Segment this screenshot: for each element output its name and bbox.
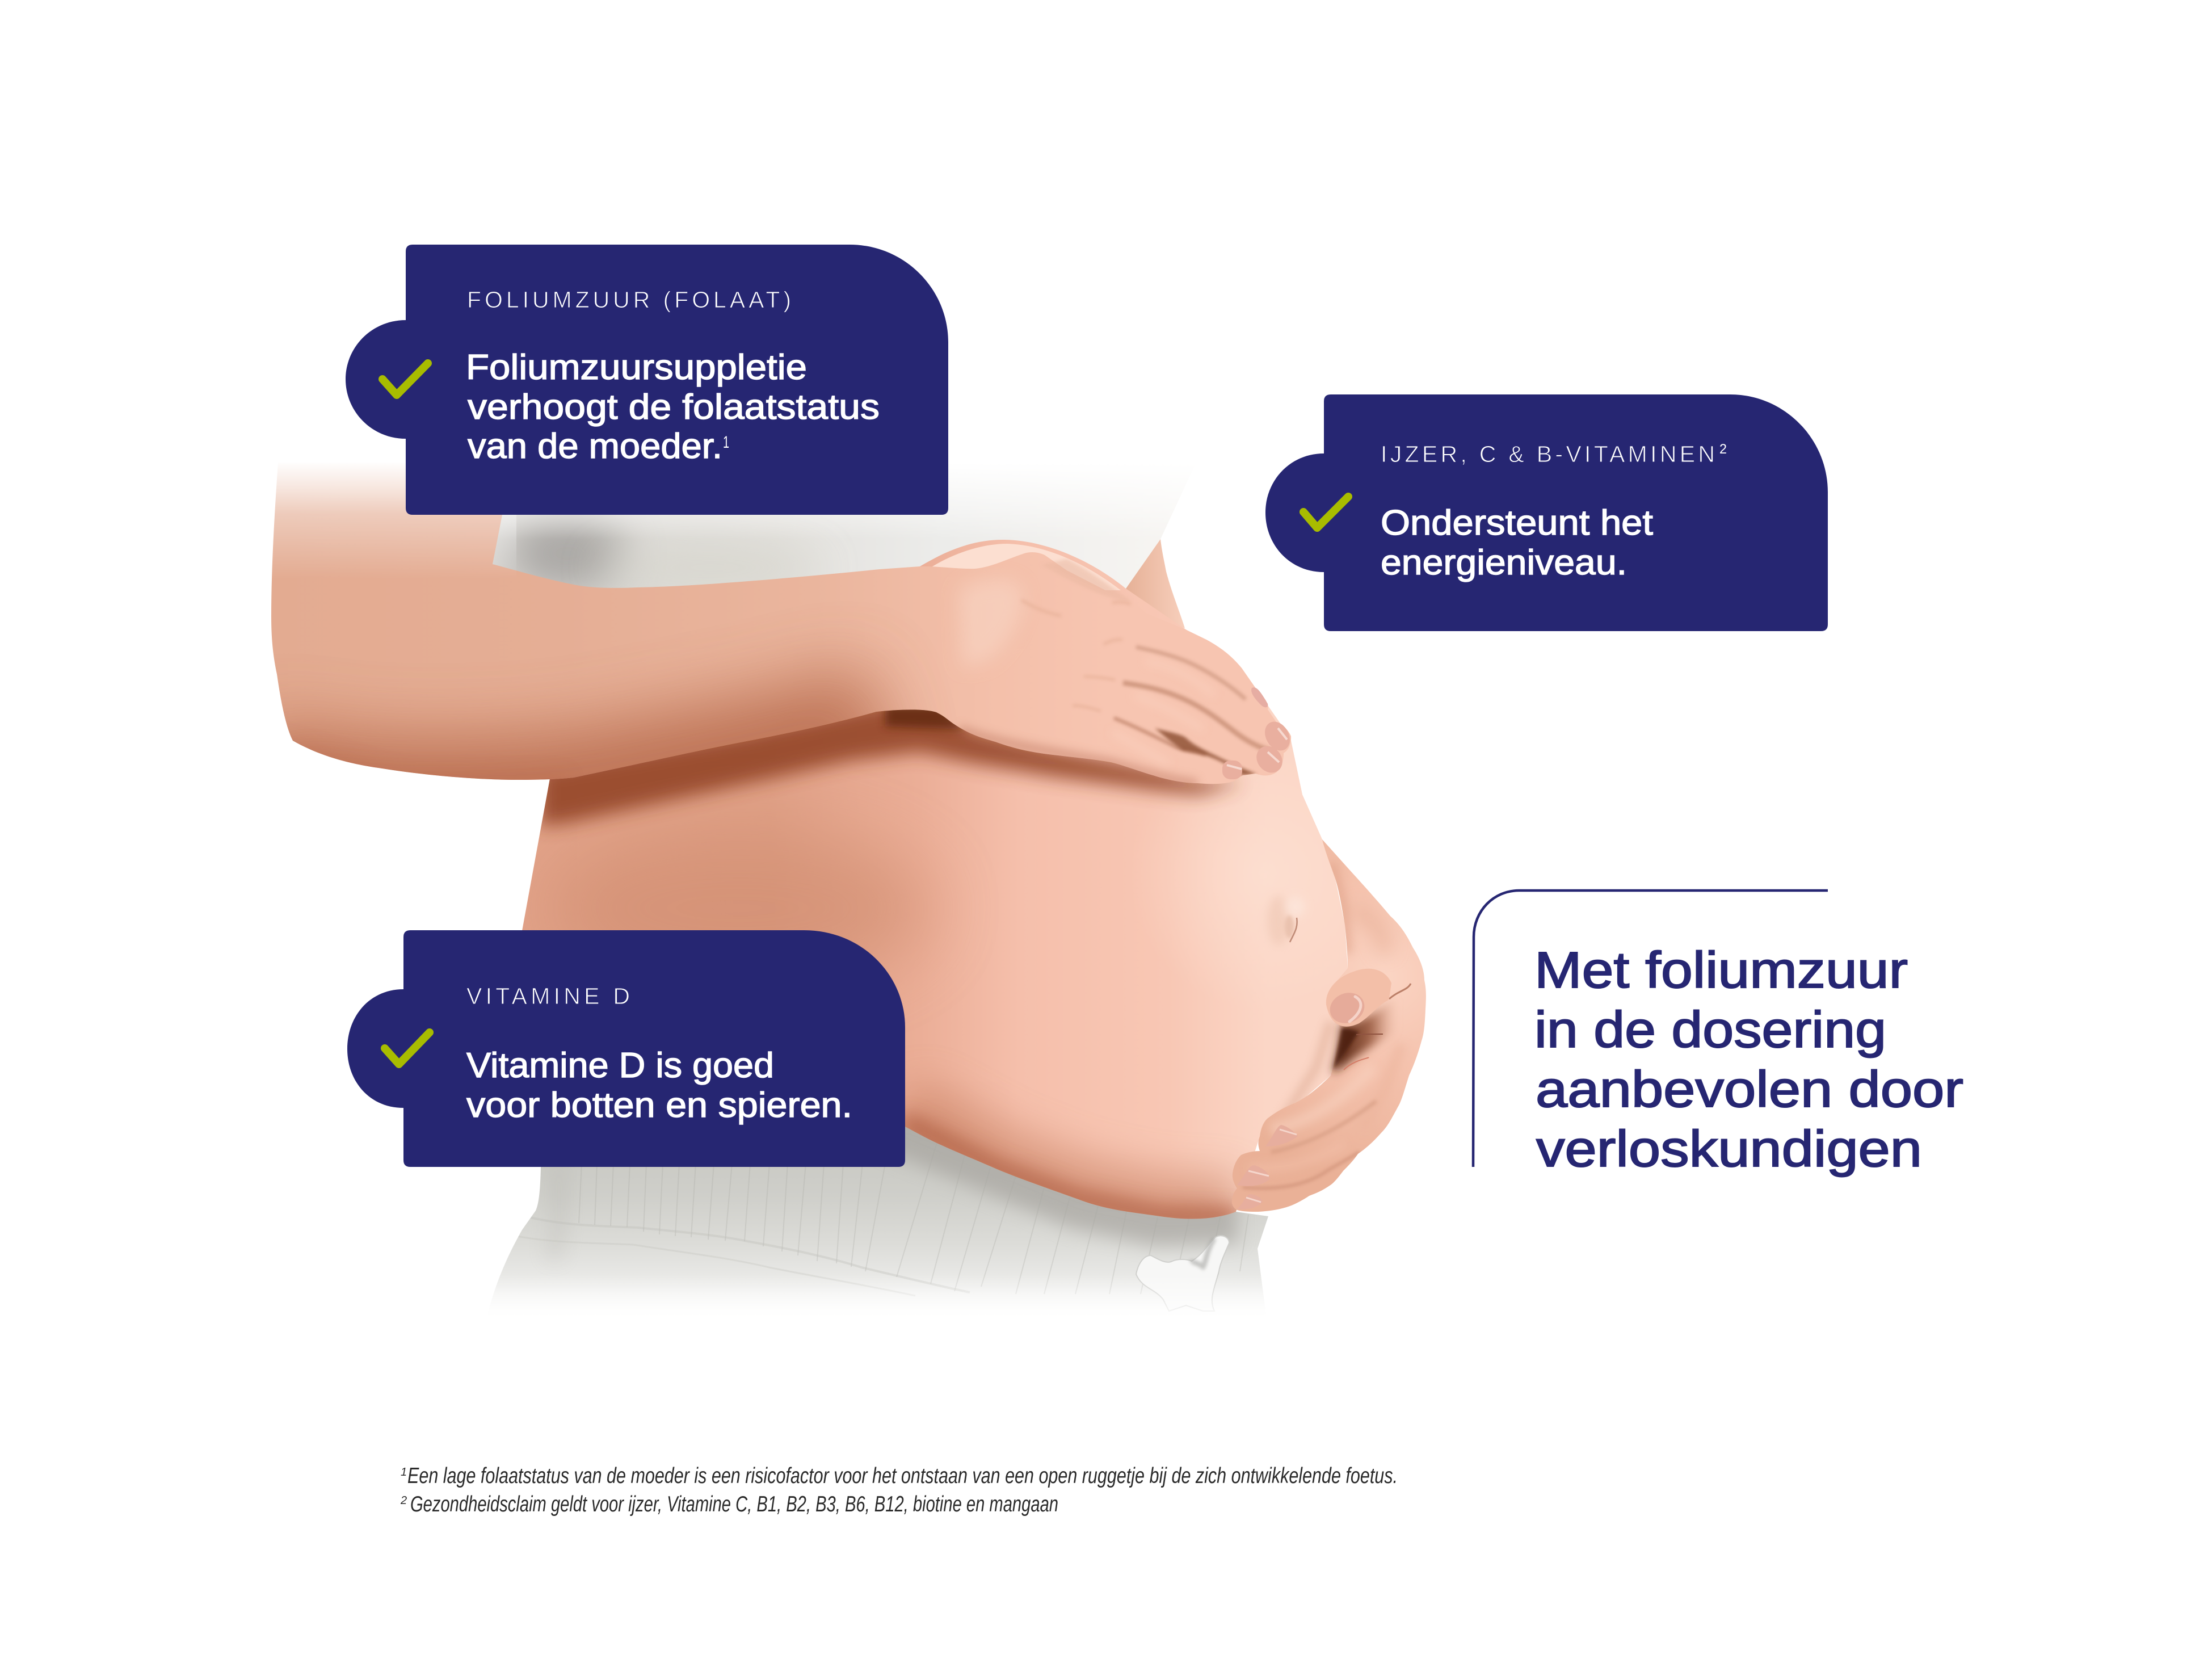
finger gaps (1136, 647, 1246, 699)
shadow cast by the arm and hand (539, 704, 1243, 826)
callout heading (1534, 942, 1963, 1178)
finger highlights (1112, 661, 1214, 763)
panel: vitamine D (347, 930, 905, 1167)
panel: foliumzuur (346, 245, 948, 515)
text: ijzer claim: Ondersteunt het (1381, 503, 1653, 543)
callout corner line (1473, 890, 1828, 1167)
text: vitamine D claim: voor botten en spieren. (466, 1086, 852, 1125)
finger nails (1237, 1125, 1298, 1209)
icon: check mark (385, 1032, 430, 1064)
footnote 1: Een lage folaatstatus van de moeder is een risicofactor voor het ontstaan van een open ruggetje bij de zich ontwikkelende foetus. (407, 1464, 1398, 1488)
text: foliumzuur claim: van de moeder. (468, 427, 722, 466)
footnotes (400, 1464, 1398, 1517)
side of torso (1126, 539, 1185, 628)
text: ijzer claim (1381, 503, 1653, 582)
thumb (1326, 969, 1391, 1027)
belly dark flank (558, 829, 935, 969)
footnote 1: 1 (401, 1466, 407, 1478)
top fade of the arm (267, 460, 516, 579)
navel (1267, 896, 1305, 946)
footnote 2: Gezondheidsclaim geldt voor ijzer, Vitamine C, B1, B2, B3, B6, B12, biotine en mangaan (410, 1492, 1058, 1517)
resting hand nails (1222, 687, 1295, 779)
lower hand cradling the belly (1232, 839, 1426, 1212)
callout: recommended by midwives (1473, 890, 1963, 1178)
callout heading: aanbevolen door (1536, 1061, 1963, 1118)
label: vitamine D: VITAMINE D (466, 983, 630, 1009)
belly top highlight (931, 544, 1121, 590)
label: ijzer: IJZER, C & B-VITAMINEN (1381, 441, 1715, 467)
text: foliumzuur claim: 1 (723, 433, 729, 452)
callout heading: in de dosering (1534, 1002, 1886, 1058)
callout heading: Met foliumzuur (1534, 942, 1908, 999)
icon: check mark (382, 363, 428, 395)
label superscript: 2 (1719, 442, 1727, 457)
crevice between thumb and fingers (1332, 993, 1399, 1074)
shirt (493, 495, 1174, 588)
belly lower shading (902, 1112, 1237, 1215)
text: foliumzuur claim: verhoogt de folaatstatus (468, 388, 880, 427)
wrist highlight (959, 579, 1023, 667)
illustration: pregnant belly with hands (250, 460, 1426, 1325)
belly (511, 540, 1402, 1219)
text: foliumzuur claim: Foliumzuursuppletie (466, 348, 807, 387)
callout heading: verloskundigen (1536, 1121, 1922, 1178)
text: foliumzuur claim (466, 348, 880, 466)
trouser drawstring (1136, 1236, 1229, 1311)
top edge crease of the hand (1041, 559, 1132, 600)
label: foliumzuur: FOLIUMZUUR (FOLAAT) (467, 287, 791, 313)
panel: ijzer, C en B-vitaminen (1265, 394, 1828, 631)
upper arm and resting hand (250, 460, 1295, 793)
trousers with ribbed fabric (493, 1127, 1268, 1312)
footnote 2: 2 (400, 1494, 407, 1507)
text: vitamine D claim: Vitamine D is goed (466, 1046, 774, 1085)
thumb nail (1326, 988, 1369, 1028)
text: ijzer claim: energieniveau. (1381, 543, 1627, 582)
trouser bottom fade (477, 1274, 1282, 1325)
text: vitamine D claim (466, 1046, 852, 1125)
knuckle creases (1021, 600, 1130, 711)
icon: check mark (1303, 497, 1348, 528)
